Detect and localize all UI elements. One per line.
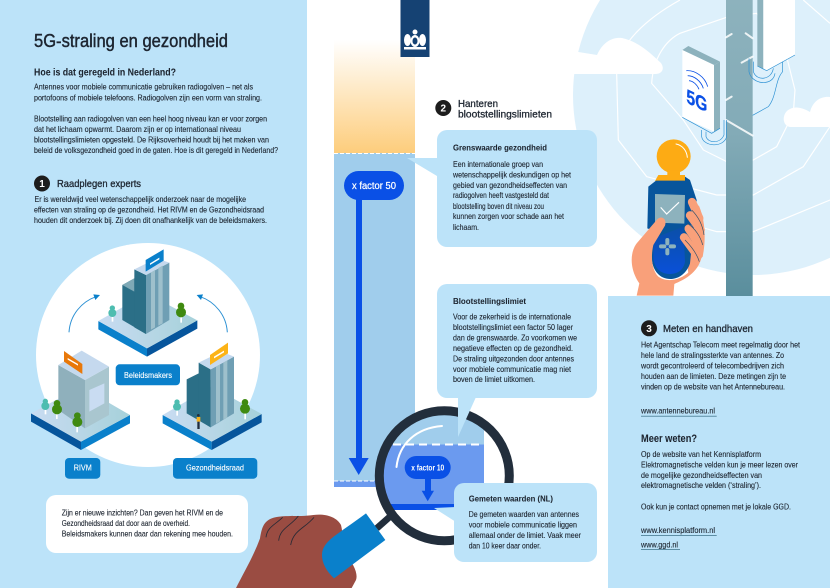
callout: Blootstellingslimiet: voor mobiele communicatie mag niet xyxy=(453,365,572,374)
hand holding device xyxy=(632,202,704,296)
callout: Blootstellingslimiet: Voor de zekerheid is de internationale xyxy=(453,312,571,322)
step 3 text: vinden op de website van het Antennebureau. xyxy=(641,382,785,392)
brackets xyxy=(726,33,753,136)
intro text: beleid de volksgezondheid goed in de gaten. Hoe is dit geregeld in Nederland? xyxy=(34,146,279,155)
callout: new insights: Gezondheidsraad dat door aan de overheid. xyxy=(62,519,190,528)
label: Gezondheidsraad: Gezondheidsraad xyxy=(186,462,244,472)
step 3 text: Het Agentschap Telecom meet regelmatig door het xyxy=(641,340,801,350)
callout: Gemeten waarden: dan 10 keer daar onder. xyxy=(469,542,541,550)
step 3 text: hele land de stralingssterkte van antennes. Zo xyxy=(641,351,785,360)
illustration: measuring device in hand xyxy=(632,139,705,296)
callout: Gemeten waarden: allemaal onder de limiet. Vaak meer xyxy=(469,531,581,540)
intro text xyxy=(34,82,279,155)
callout: Blootstellingslimiet: negatieve effecten op de gezondheid. xyxy=(453,344,573,353)
link: antennebureau: www.antennebureau.nl xyxy=(640,406,715,416)
more information xyxy=(640,433,798,550)
pill and arrow: x factor 50: x factor 50 xyxy=(352,180,396,192)
hand back and fingers base xyxy=(683,198,705,273)
subtitle: Hoe is dat geregeld in Nederland? xyxy=(34,66,176,78)
callout: Blootstellingslimiet: blootstellingslimiet een factor 50 lager xyxy=(453,323,573,332)
antenna: right xyxy=(757,0,795,71)
illustration: mast with antennas xyxy=(682,0,795,297)
label: RIVM: RIVM xyxy=(74,462,92,472)
step 2 heading: blootstellingslimieten xyxy=(458,108,552,120)
step 2 heading xyxy=(435,98,552,120)
step 1 heading: Raadplegen experts xyxy=(57,178,141,190)
pill and arrow: x factor 50 xyxy=(344,171,404,475)
cloud: right xyxy=(784,97,830,127)
step 1 text: effecten van straling op de gezondheid. Het RIVM en de Gezondheidsraad xyxy=(34,206,264,214)
label: Beleidsmakers: Beleidsmakers xyxy=(124,370,172,380)
person xyxy=(197,414,200,429)
intro text: Antennes voor mobiele communicatie gebruiken radiogolven – net als xyxy=(34,82,253,92)
panel: left background xyxy=(0,0,307,588)
building: Beleidsmakers xyxy=(98,249,197,357)
callout: Blootstellingslimiet: Blootstellingslimiet xyxy=(453,296,526,306)
callout: Grenswaarde gezondheid xyxy=(407,130,597,247)
intro text: portofoons of mobiele telefoons. Radiogolven zijn een vorm van straling. xyxy=(34,94,262,102)
pill and arrow: x factor 10 xyxy=(405,456,451,501)
callout: Grenswaarde gezondheid: gebied van gezondheidseffecten van xyxy=(453,181,567,190)
callout: Blootstellingslimiet: De straling uitgezonden door antennes xyxy=(453,354,574,364)
callout: Grenswaarde gezondheid: wetenschappelijk deskundigen op het xyxy=(452,170,572,180)
building: RIVM xyxy=(31,351,130,450)
step 1 text xyxy=(34,195,267,225)
text: more information xyxy=(641,450,798,512)
arrows xyxy=(69,297,227,332)
shaft xyxy=(377,516,391,528)
callout: Gemeten waarden xyxy=(434,483,597,562)
step 3 text: wordt gecontroleerd of telecombedrijven zich xyxy=(640,362,784,370)
intro text: dat het lichaam opwarmt. Daarom zijn er op internationaal niveau xyxy=(34,125,241,134)
callout: Grenswaarde gezondheid: blootstelling boven dit niveau zou xyxy=(453,202,544,211)
label: RIVM xyxy=(65,458,100,479)
step 3 text: houden aan de limieten. Deze metingen zijn te xyxy=(641,372,786,381)
step 1 text: houden dit onderzoek bij. Zij doen dit onafhankelijk van de beleidsmakers. xyxy=(34,216,267,225)
text: more information: elektromagnetische velden (‘straling’). xyxy=(641,481,761,490)
grip xyxy=(322,513,385,578)
keypad xyxy=(659,238,676,255)
cables xyxy=(702,58,783,145)
callout: Gemeten waarden: Gemeten waarden (NL) xyxy=(469,494,553,504)
step 2 heading: Hanteren xyxy=(458,98,498,110)
heading: Meer weten: Meer weten? xyxy=(641,433,697,445)
step 1 heading: 1 xyxy=(39,179,45,190)
mast xyxy=(726,0,753,297)
antenna: 5G: 5G xyxy=(686,86,707,117)
step 3 xyxy=(640,320,801,416)
callout: Grenswaarde gezondheid: kunnen zorgen voor schade aan het xyxy=(453,212,565,221)
logo: Rijksoverheid xyxy=(400,0,430,57)
step 2 heading: 2 xyxy=(441,104,447,114)
callout: Blootstellingslimiet: boven de limiet uitkomen. xyxy=(453,375,535,384)
illustration: three organisations xyxy=(31,243,262,479)
label: Beleidsmakers xyxy=(116,364,180,385)
background circle behind the mast xyxy=(573,0,830,275)
callout: Gemeten waarden: voor mobiele communicatie liggen xyxy=(469,520,577,530)
callout: Grenswaarde gezondheid: lichaam. xyxy=(453,223,479,232)
panel: left column text xyxy=(34,30,279,225)
hand xyxy=(236,515,357,588)
cloud: left xyxy=(566,38,663,74)
step 1 heading xyxy=(34,176,141,192)
screen xyxy=(655,194,685,224)
label: Gezondheidsraad xyxy=(173,458,257,479)
safety margin bar xyxy=(334,153,415,487)
antenna: 5G xyxy=(682,46,720,133)
callout: Grenswaarde gezondheid: Een internationale groep van xyxy=(453,160,543,169)
text: more information: de mogelijke gezondheidseffecten van xyxy=(641,471,762,480)
callout: Grenswaarde gezondheid: Grenswaarde gezondheid xyxy=(453,142,547,152)
magnifier lens xyxy=(379,400,509,541)
callout: new insights: Beleidsmakers kunnen daar dan rekening mee houden. xyxy=(62,530,233,538)
title: 5G-straling en gezondheid xyxy=(34,30,228,51)
callout: Gemeten waarden: De gemeten waarden van antennes xyxy=(469,510,579,519)
link: ggd: www.ggd.nl xyxy=(640,540,678,550)
device body xyxy=(647,177,697,279)
text: more information: Elektromagnetische velden kun je meer lezen over xyxy=(641,460,798,470)
callout: new insights xyxy=(46,495,248,553)
text: more information: Ook kun je contact opnemen met je lokale GGD. xyxy=(641,502,791,512)
callout: new insights: Zijn er nieuwe inzichten? Dan geven het RIVM en de xyxy=(62,508,223,518)
link: kennisplatform: www.kennisplatform.nl xyxy=(640,526,715,535)
orange gradient bar: above limit value xyxy=(334,40,415,153)
radiation rings xyxy=(617,0,830,232)
building: Gezondheidsraad xyxy=(163,343,262,450)
trees xyxy=(45,315,246,432)
callout: Blootstellingslimiet: dan de grenswaarde. Zo voorkomen we xyxy=(453,334,577,342)
intro text: Blootstelling aan radiogolven van een heel hoog niveau kan er voor zorgen xyxy=(34,114,267,124)
callout: Grenswaarde gezondheid: radiogolven heeft vastgesteld dat xyxy=(453,191,550,200)
sensor ball xyxy=(657,139,691,173)
text: more information: Op de website van het Kennisplatform xyxy=(641,450,761,459)
callout: Blootstellingslimiet xyxy=(437,284,597,437)
pill and arrow: x factor 10: x factor 10 xyxy=(411,464,445,472)
step 3 heading: 3 xyxy=(646,324,652,335)
step 3 heading xyxy=(641,320,753,336)
step 3 text xyxy=(640,340,801,392)
panel: measure and enforce xyxy=(608,296,830,588)
step 1 text: Er is wereldwijd veel wetenschappelijk onderzoek naar de mogelijke xyxy=(34,195,246,204)
white circle xyxy=(36,243,260,467)
step 3 heading: Meten en handhaven xyxy=(663,323,753,335)
magnifier handle and hand xyxy=(236,513,391,588)
intro text: blootstellingslimieten opgesteld. De Rijksoverheid houdt bij het maken van xyxy=(34,136,269,144)
